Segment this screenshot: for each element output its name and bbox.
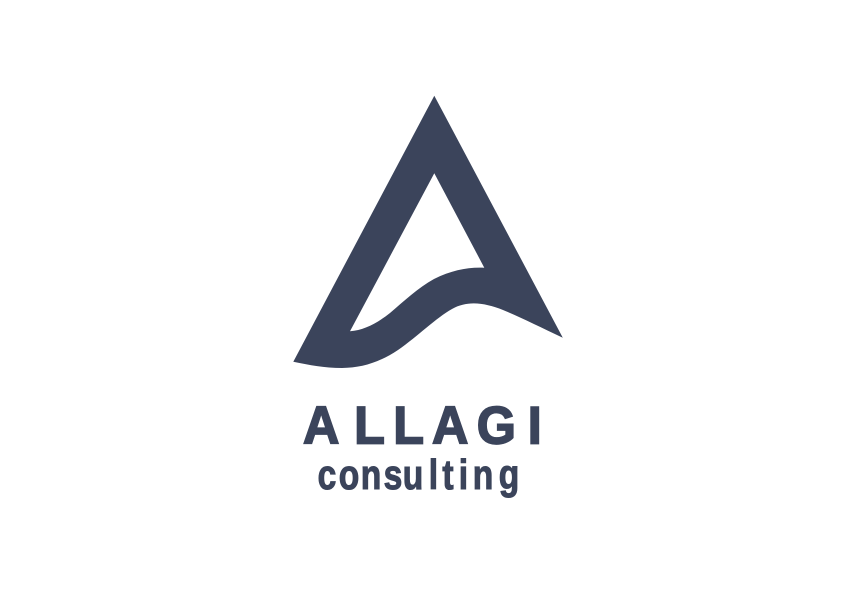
icon: stylised A mark	[293, 96, 563, 368]
wordmark: ALLAGI: ALLAGI	[303, 395, 542, 455]
tagline: consulting: consulting	[318, 452, 519, 499]
